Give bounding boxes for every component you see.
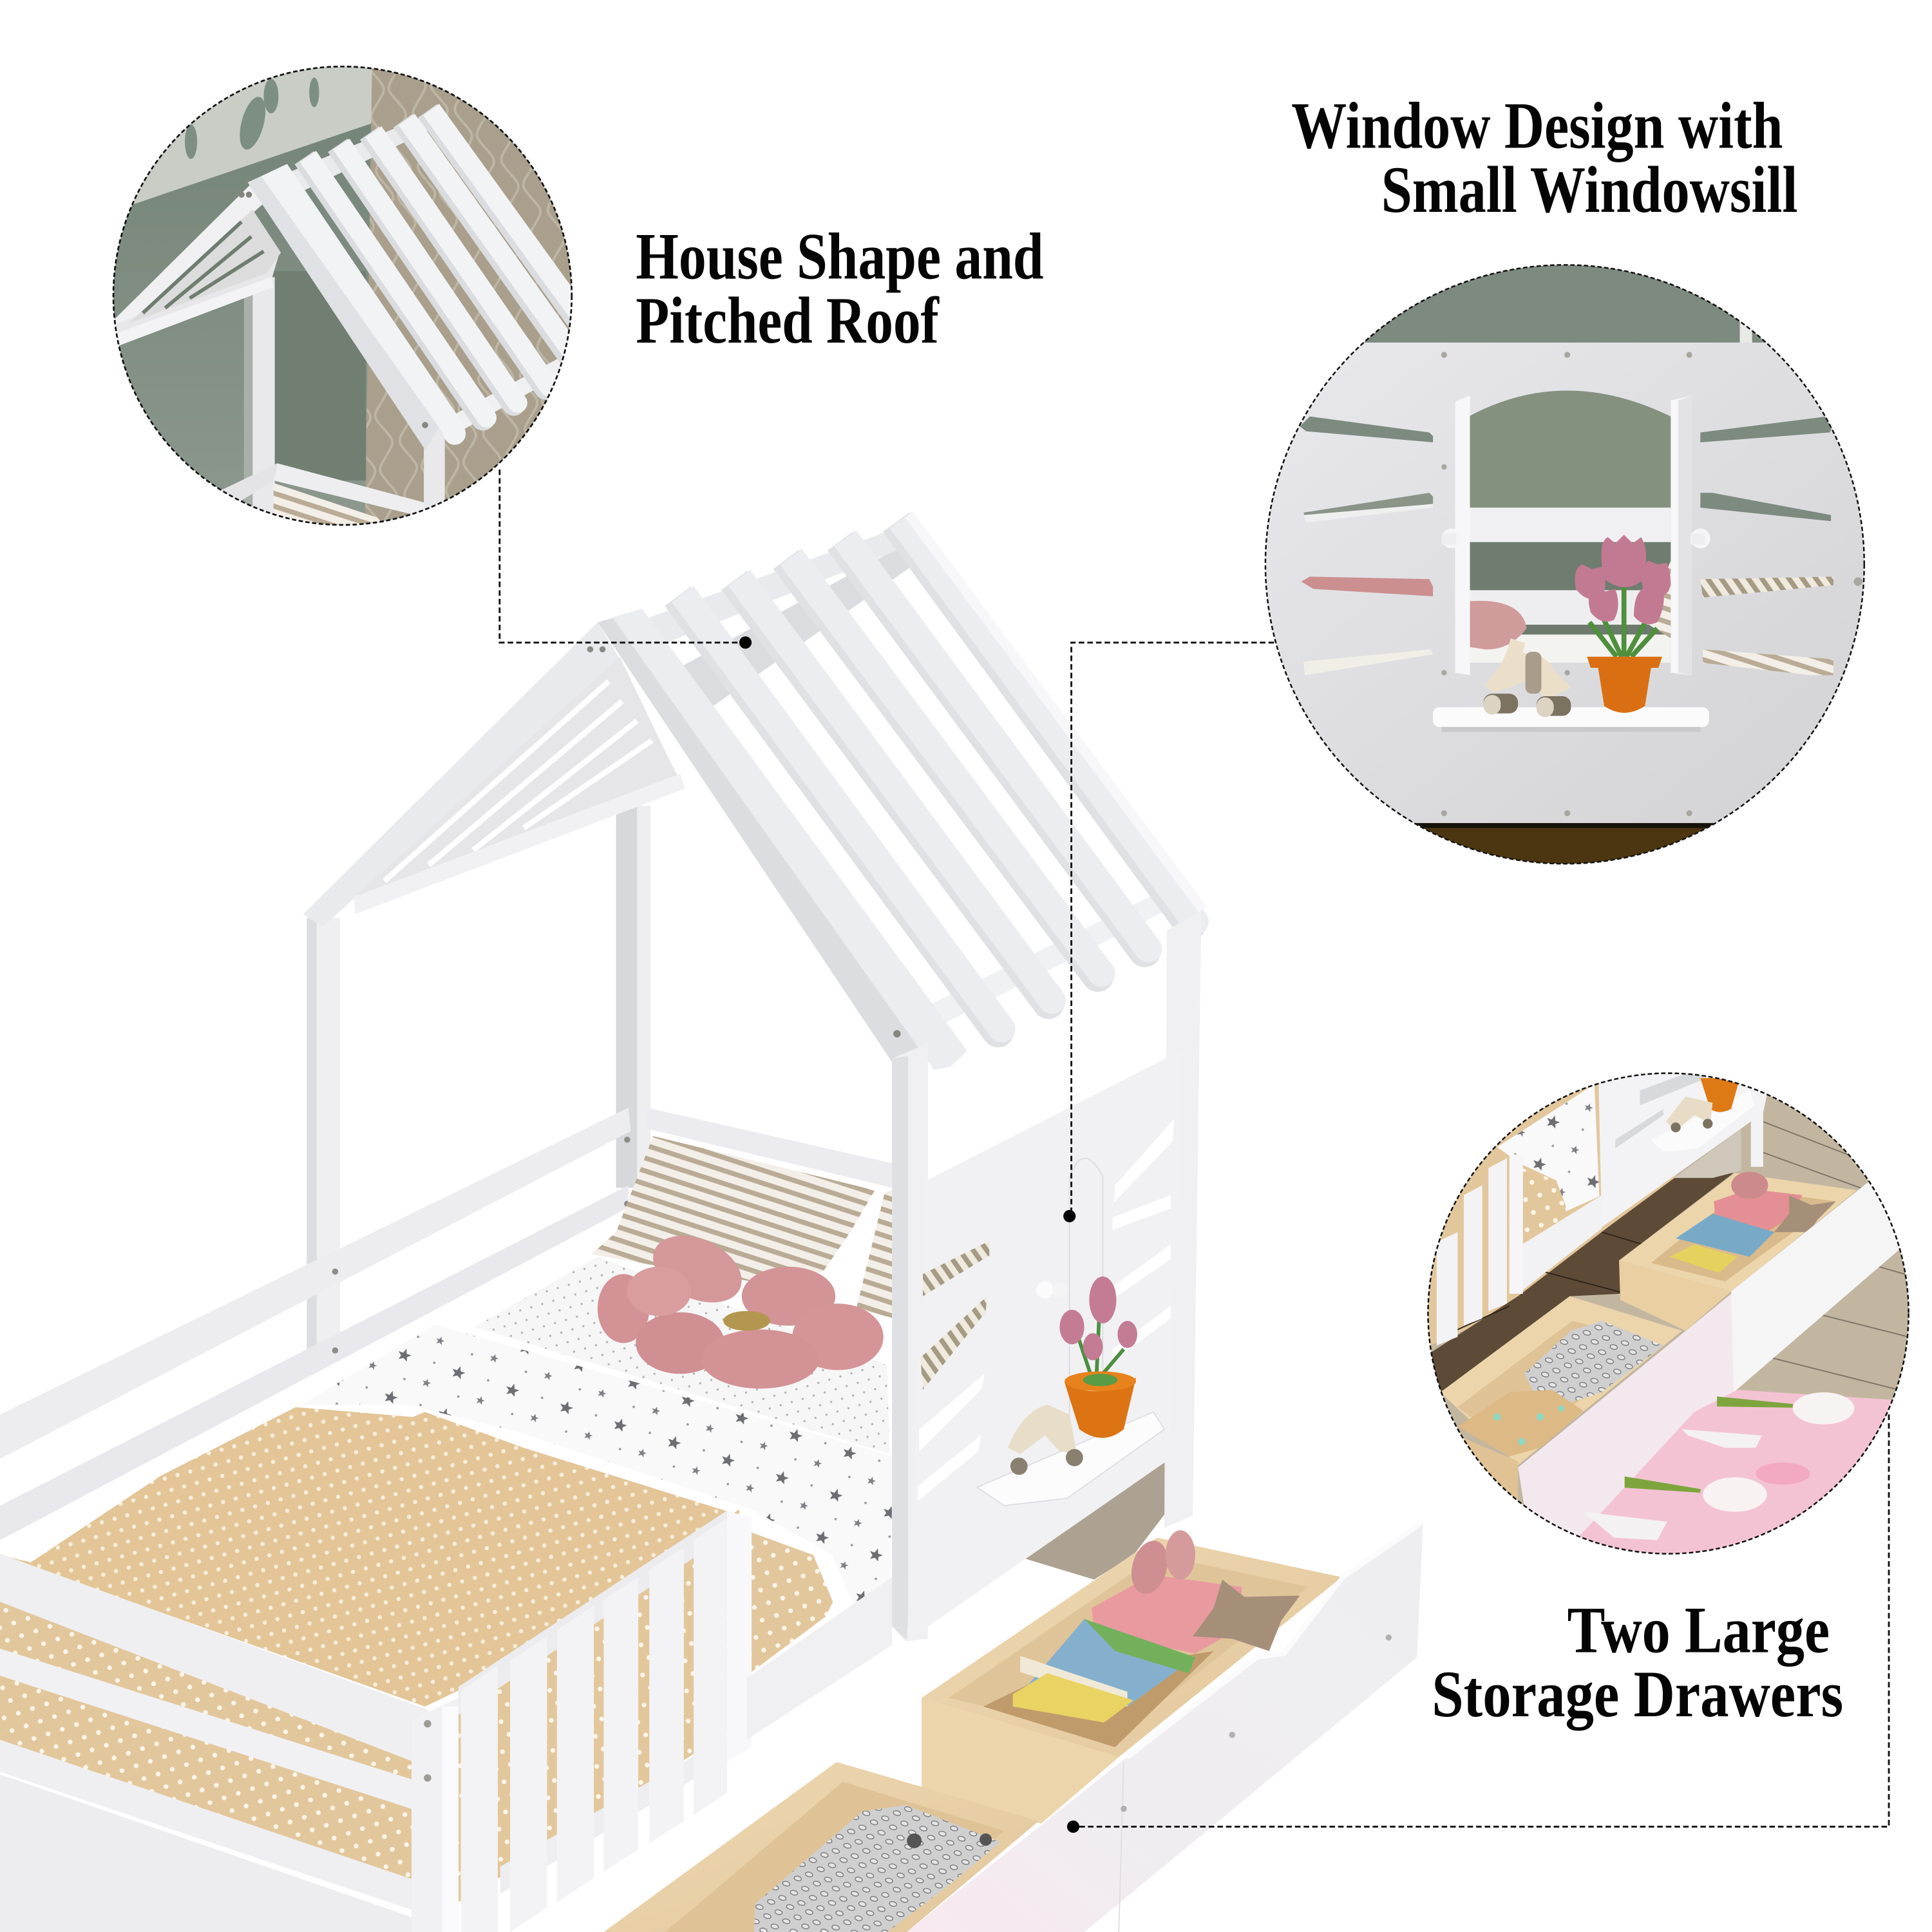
front and right posts [892, 912, 1201, 1641]
toy rabbit [1484, 638, 1571, 700]
drawer contents [1714, 1189, 1803, 1235]
side rail [1518, 1195, 1602, 1294]
star bedding [335, 1334, 892, 1601]
striped pillow [1645, 561, 1671, 638]
leader line: roof [500, 469, 752, 649]
callout circle: roof detail [111, 62, 589, 530]
foot rails [0, 1554, 459, 1932]
panel [1598, 1059, 1774, 1227]
drawer front board [907, 1522, 1423, 1932]
leader line: window [1063, 643, 1274, 1222]
small sill with flowers and toy [977, 1276, 1164, 1506]
roof left plane [303, 622, 685, 927]
heading: House Shape and Pitched Roof [636, 220, 1044, 357]
callout circle: drawer detail [1417, 1059, 1922, 1565]
roof slats [677, 515, 1209, 1047]
bed backdrop [1417, 1059, 1762, 1356]
house side panel [907, 1050, 1183, 1641]
fence slats [459, 1511, 892, 1932]
screws [1441, 352, 1862, 816]
heading: Window Design with Small Windowsill: Window Design with [1291, 90, 1783, 163]
inner shadow wall [274, 271, 366, 480]
pink pillow [1469, 601, 1527, 649]
striped pillows [591, 1136, 893, 1318]
heading: House Shape and Pitched Roof: House Shape and [636, 220, 1044, 293]
tan duvet top [0, 1407, 733, 1707]
windowsill [1433, 707, 1709, 727]
slats [305, 109, 589, 431]
rug decor [1719, 1399, 1793, 1406]
main bed illustration [0, 515, 1423, 1932]
mini toy [1666, 1097, 1712, 1131]
slots [1300, 417, 1433, 442]
dark floor [1417, 1173, 1734, 1411]
striped pillow [274, 483, 390, 530]
front rafter [248, 169, 441, 450]
post [252, 277, 275, 518]
leader line: drawers [1067, 1414, 1889, 1833]
taupe under bed [1674, 1129, 1741, 1178]
drawer front [1518, 1180, 1912, 1558]
pot [1587, 657, 1662, 713]
heading: Two Large Storage Drawers [1432, 1594, 1843, 1731]
heading: Window Design with Small Windowsill: Small Windowsill [1381, 153, 1797, 227]
mini pot [1700, 1078, 1740, 1112]
heading: Two Large Storage Drawers: Two Large [1567, 1594, 1830, 1667]
bottom rail [274, 463, 425, 518]
shutters [1455, 395, 1470, 675]
purlins [259, 116, 433, 204]
pink rug [1558, 1390, 1916, 1558]
bed front lower panel [0, 1774, 419, 1932]
fence slats [1510, 1155, 1523, 1294]
tan duvet [1522, 1168, 1566, 1244]
rear left posts and side rails [0, 806, 892, 1540]
roof right plane: purlins [626, 530, 1173, 1032]
clothes [1524, 1321, 1663, 1402]
heading: Window Design with Small Windowsill [1291, 90, 1797, 227]
near drawer [1441, 1296, 1682, 1465]
light floor [1417, 1059, 1922, 1565]
heading: House Shape and Pitched Roof: Pitched Roof [636, 284, 940, 357]
upper storage drawer [922, 1530, 1342, 1824]
tulips [1575, 535, 1671, 624]
front rafter [587, 609, 967, 1070]
near storage drawer [604, 1762, 1039, 1932]
upper drawer [1619, 1173, 1857, 1291]
heading: Two Large Storage Drawers: Storage Drawers [1432, 1658, 1843, 1731]
callout circle: window detail [1257, 259, 1873, 867]
under-bed shadow [1025, 1463, 1164, 1580]
stems [1589, 579, 1657, 657]
wallpaper [111, 62, 372, 212]
flower pillow [598, 1222, 884, 1388]
left roof plane [111, 182, 263, 339]
mattress sheet [475, 1257, 889, 1454]
small shelf [1651, 1090, 1754, 1152]
tan side panel [746, 1531, 833, 1676]
window opening [1469, 391, 1671, 663]
front hanging duvet bands [0, 1510, 739, 1904]
star sheet [1497, 1084, 1599, 1211]
curtain [365, 62, 579, 530]
